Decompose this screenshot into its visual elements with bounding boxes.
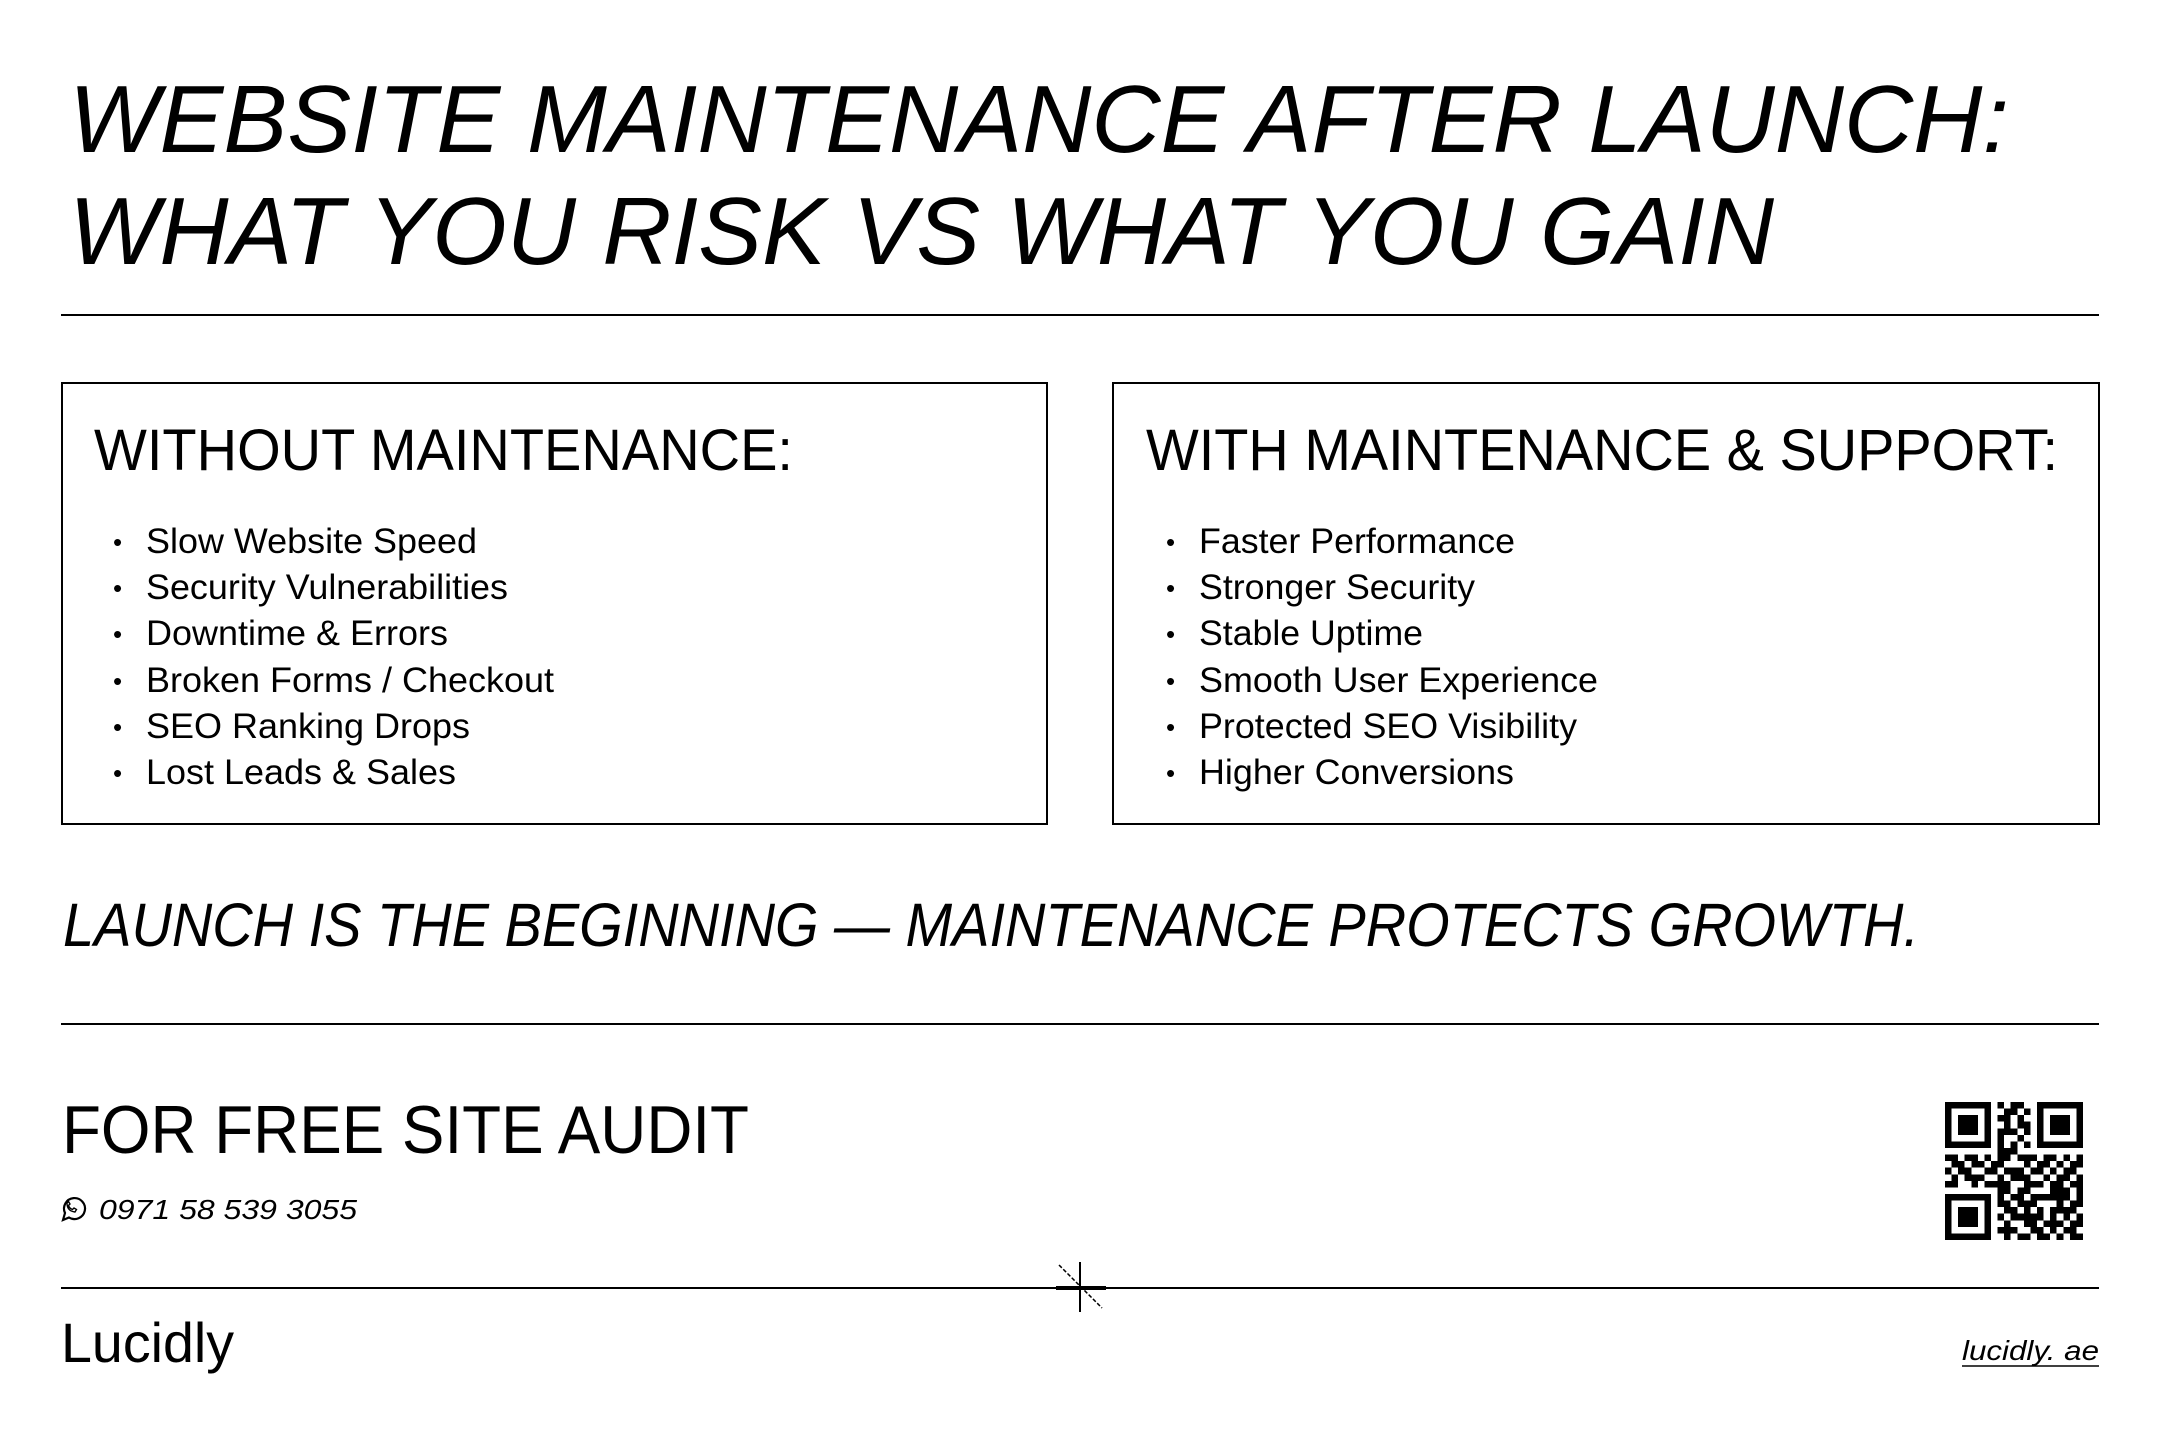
title: WHAT YOU RISK VS WHAT YOU GAIN <box>69 178 1775 285</box>
tagline: LAUNCH IS THE BEGINNING — MAINTENANCE PROTECTS GROWTH. <box>63 891 1919 959</box>
cta heading: FOR FREE SITE AUDIT <box>62 1092 749 1168</box>
list: gains: • <box>1166 712 1175 742</box>
icon: crosshair star <box>1056 1262 1106 1312</box>
list: gains: • <box>1166 619 1175 649</box>
qr code <box>1945 1102 2083 1240</box>
list: risks: Security Vulnerabilities <box>146 568 508 607</box>
list: gains: • <box>1166 527 1175 557</box>
list: risks: • <box>113 573 122 603</box>
list: gains: • <box>1166 573 1175 603</box>
contact: phone: 0971 58 539 3055 <box>99 1194 357 1225</box>
list: gains: • <box>1166 758 1175 788</box>
list: gains: Stronger Security <box>1199 568 1475 607</box>
panel: with maintenance <box>1113 383 2099 824</box>
list: risks: • <box>113 666 122 696</box>
list: gains <box>1166 522 1598 792</box>
list: risks <box>113 522 554 792</box>
list: risks: Broken Forms / Checkout <box>146 661 554 700</box>
icon: whatsapp <box>63 1198 85 1220</box>
title: WEBSITE MAINTENANCE AFTER LAUNCH: <box>69 66 2009 173</box>
list: risks: Slow Website Speed <box>146 522 477 561</box>
list: gains: Smooth User Experience <box>1199 661 1598 700</box>
list: risks: • <box>113 758 122 788</box>
list: risks: SEO Ranking Drops <box>146 707 470 746</box>
list: gains: Faster Performance <box>1199 522 1515 561</box>
list: risks: • <box>113 527 122 557</box>
heading: with maintenance: WITH MAINTENANCE & SUPPORT: <box>1146 418 2058 483</box>
list: gains: Stable Uptime <box>1199 614 1423 653</box>
list: risks: • <box>113 619 122 649</box>
list: risks: Downtime & Errors <box>146 614 448 653</box>
list: risks: Lost Leads & Sales <box>146 753 456 792</box>
heading: without maintenance: WITHOUT MAINTENANCE: <box>94 418 793 483</box>
list: gains: • <box>1166 666 1175 696</box>
logo: Lucidly: Lucidly <box>61 1311 234 1374</box>
panel: without maintenance <box>62 383 1047 824</box>
list: gains: Protected SEO Visibility <box>1199 707 1578 746</box>
list: risks: • <box>113 712 122 742</box>
title <box>69 66 2009 285</box>
list: gains: Higher Conversions <box>1199 753 1514 792</box>
website link: lucidly. ae <box>1962 1335 2099 1366</box>
